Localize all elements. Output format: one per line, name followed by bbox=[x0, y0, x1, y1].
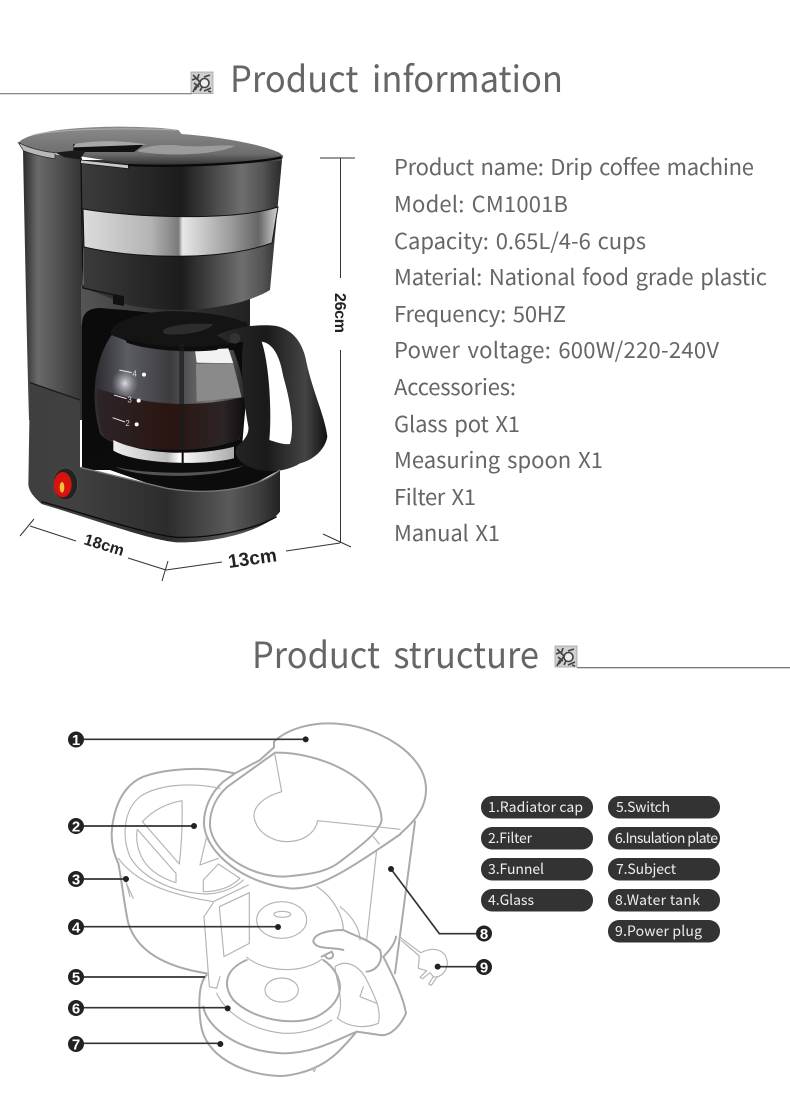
steel band bbox=[83, 207, 278, 256]
silver ring bbox=[113, 440, 234, 463]
text block: product specifications: Glass pot X1 bbox=[394, 407, 520, 439]
heading: product structure bbox=[252, 627, 790, 679]
leader lines bbox=[76, 736, 483, 1047]
volume marks: 3 bbox=[127, 396, 132, 405]
number markers: 2 bbox=[72, 818, 80, 836]
lid centre recess bbox=[73, 144, 143, 152]
legend: part names: 9.Power plug bbox=[615, 921, 702, 941]
machine base and lower column bbox=[28, 383, 280, 542]
filter openings bbox=[137, 801, 240, 892]
legend: part names: 3.Funnel bbox=[488, 859, 544, 879]
legend: part names: 2.Filter bbox=[488, 828, 533, 848]
text block: product specifications: Power voltage: 600W/220-240V bbox=[394, 333, 719, 365]
text block: product specifications: Filter X1 bbox=[394, 480, 476, 512]
text block: product specifications: Accessories: bbox=[394, 370, 516, 402]
legend: part names: 1.Radiator cap bbox=[488, 797, 583, 817]
plate bbox=[227, 960, 340, 1021]
base outline bbox=[199, 975, 357, 1076]
volume marks bbox=[113, 370, 146, 428]
dimension: depth 18cm bbox=[20, 519, 166, 570]
legend: part names: 8.Water tank bbox=[615, 890, 700, 910]
title text: Product information bbox=[230, 51, 563, 103]
number markers: 5 bbox=[72, 970, 80, 986]
dimension: depth 18cm: 18cm bbox=[82, 532, 126, 560]
diagram: machine line drawing bbox=[76, 723, 483, 1076]
tank outline bbox=[274, 723, 426, 973]
text block: product specifications: Material: National food grade plastic bbox=[394, 260, 767, 292]
number markers: 7 bbox=[72, 1036, 80, 1054]
legend: part names: 5.Switch bbox=[616, 797, 670, 817]
dimension: width 13cm bbox=[162, 543, 340, 581]
text block: product specifications bbox=[394, 150, 767, 548]
dimension: width 13cm: 13cm bbox=[227, 545, 278, 573]
machine lid bbox=[18, 127, 283, 169]
carafe lid bbox=[110, 311, 253, 350]
legend: part names: 4.Glass bbox=[488, 890, 534, 910]
neck panel behind head bbox=[81, 285, 250, 325]
number markers bbox=[68, 732, 492, 1054]
carafe outline bbox=[204, 887, 360, 988]
number markers: 9 bbox=[480, 960, 488, 976]
volume marks: 2 bbox=[125, 419, 130, 428]
machine cavity bbox=[82, 308, 246, 470]
coffee bbox=[97, 388, 245, 449]
power plug bbox=[399, 937, 447, 985]
handle outline bbox=[313, 930, 406, 1035]
text block: product specifications: Frequency: 50HZ bbox=[394, 297, 566, 329]
text block: product specifications: Measuring spoon X1 bbox=[394, 443, 603, 475]
number markers: 4 bbox=[72, 920, 81, 936]
text block: product specifications: Capacity: 0.65L/4-6 cups bbox=[394, 224, 646, 256]
icon: heading ornament bbox=[555, 646, 577, 667]
text block: product specifications: Manual X1 bbox=[394, 516, 500, 548]
power switch bbox=[53, 468, 78, 500]
machine water head bbox=[81, 160, 282, 310]
text block: product specifications: Product name: Drip coffee machine bbox=[394, 150, 754, 182]
funnel outline bbox=[112, 769, 235, 973]
dimension: height 26cm bbox=[320, 158, 355, 547]
hot plate bbox=[82, 451, 278, 495]
photo: coffee machine bbox=[18, 127, 327, 542]
text block: product specifications: Model: CM1001B bbox=[394, 187, 568, 219]
lid recess bbox=[254, 755, 400, 844]
title text: Product structure bbox=[252, 627, 539, 679]
volume marks: 4 bbox=[132, 370, 137, 379]
glass highlight bbox=[112, 368, 138, 398]
carafe glass bbox=[95, 335, 245, 449]
lid outline bbox=[210, 753, 382, 877]
number markers: 1 bbox=[72, 732, 80, 749]
dimension: height 26cm: 26cm bbox=[331, 293, 348, 333]
machine rear column bbox=[23, 150, 82, 420]
heading: product information bbox=[0, 51, 563, 103]
carafe handle bbox=[217, 325, 327, 471]
legend: part names bbox=[481, 796, 720, 942]
number markers: 8 bbox=[480, 926, 488, 943]
lid left lip bbox=[18, 143, 55, 159]
carafe group bbox=[28, 311, 327, 542]
legend: part names: 6.Insulation plate bbox=[615, 828, 718, 848]
icon: heading ornament bbox=[191, 72, 213, 94]
legend: part names: 7.Subject bbox=[616, 859, 677, 879]
lid front latch bbox=[55, 151, 85, 159]
glass reflection bbox=[195, 348, 233, 363]
number markers: 6 bbox=[72, 1000, 80, 1018]
number markers: 3 bbox=[72, 872, 80, 888]
